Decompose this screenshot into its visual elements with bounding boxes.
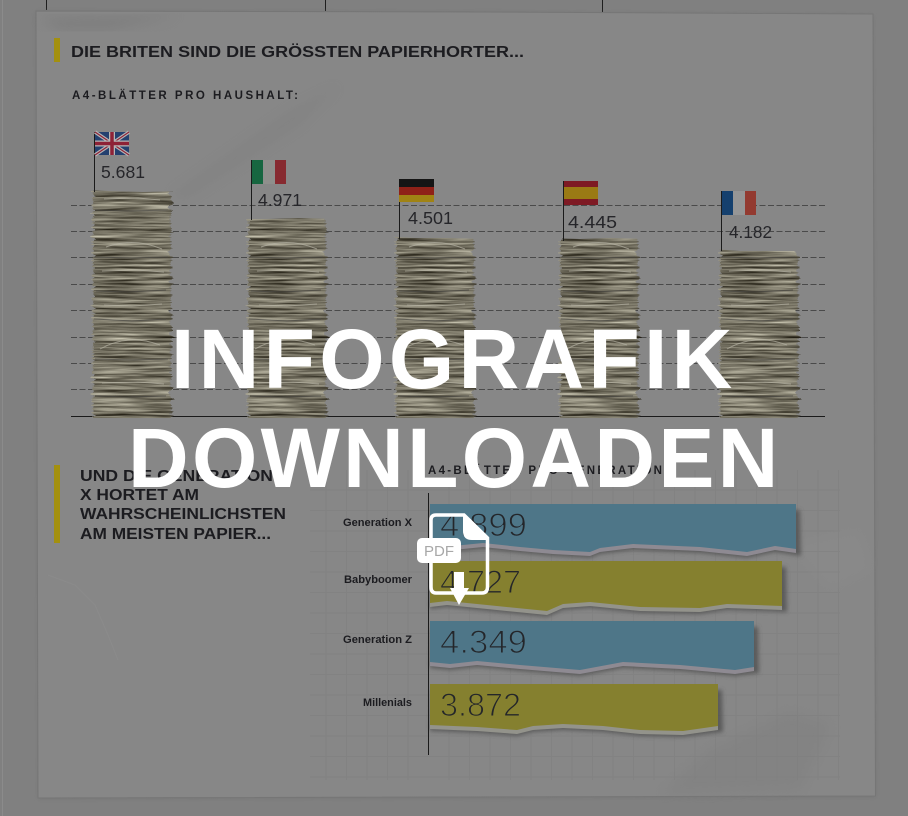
- heading: generations: X HORTET AM: [80, 487, 199, 504]
- bar: Babyboomer: 4.727: [440, 564, 521, 600]
- bar: Babyboomer: [430, 561, 787, 617]
- bar: Generation Z: 4.349: [440, 624, 527, 660]
- flag: France: [722, 191, 756, 251]
- section accent bar: generations: [54, 465, 60, 543]
- category labels: Babyboomer: [344, 574, 413, 586]
- value: UK: 5.681: [101, 162, 145, 182]
- stack: UK 5.681: [93, 185, 171, 421]
- category labels: Generation X: [343, 517, 413, 529]
- graph paper grid: [310, 470, 840, 780]
- heading: generations: [80, 468, 286, 543]
- chart subtitle: sheets per generation: A4-BLÄTTER PRO GENERATION:: [428, 464, 668, 477]
- overlay title: Infografik downloaden: DOWNLOADEN: [128, 411, 782, 505]
- stack: Italy 4.971: [248, 185, 326, 421]
- flag: Spain: [564, 181, 598, 241]
- top edge ticks from the section above: [46, 0, 602, 12]
- chart: paper stacks by country: [71, 132, 825, 421]
- value: France: 4.182: [729, 222, 772, 242]
- overlay title: Infografik downloaden: [128, 312, 782, 505]
- value: Spain: 4.445: [568, 212, 617, 232]
- bar: Generation Z: [430, 621, 759, 676]
- chart subtitle: sheets per household: A4-BLÄTTER PRO HAUSHALT:: [72, 89, 298, 102]
- value: Germany: 4.501: [408, 208, 453, 228]
- icon: PDF download: [417, 514, 489, 605]
- category labels: Millenials: [363, 697, 412, 709]
- stack: Germany 4.501: [394, 237, 478, 418]
- bar: Generation X: 4.899: [440, 507, 527, 543]
- bar: Generation X: [430, 504, 801, 558]
- stack: France 4.182: [718, 250, 802, 418]
- heading: generations: UND DIE GENERATION: [80, 468, 273, 485]
- overlay title: Infografik downloaden: INFOGRAFIK: [171, 312, 737, 406]
- value: Italy: 4.971: [258, 190, 302, 210]
- heading: generations: AM MEISTEN PAPIER...: [80, 526, 271, 543]
- heading: generations: WAHRSCHEINLICHSTEN: [80, 506, 286, 523]
- flag: UK: [94, 132, 129, 192]
- chart: torn paper bars by generation: [343, 493, 801, 755]
- category labels: [343, 517, 413, 709]
- icon: PDF download: PDF: [424, 543, 454, 560]
- bar: Millenials: 3.872: [440, 687, 521, 723]
- bar: Millenials: [430, 684, 723, 737]
- category labels: Generation Z: [343, 634, 412, 646]
- section accent bar: top: [54, 38, 60, 62]
- stack: Spain 4.445: [558, 238, 642, 418]
- flag: Germany: [399, 179, 434, 239]
- flag: Italy: [252, 160, 286, 220]
- heading: top: DIE BRITEN SIND DIE GRÖSSTEN PAPIERHORTER...: [71, 42, 524, 61]
